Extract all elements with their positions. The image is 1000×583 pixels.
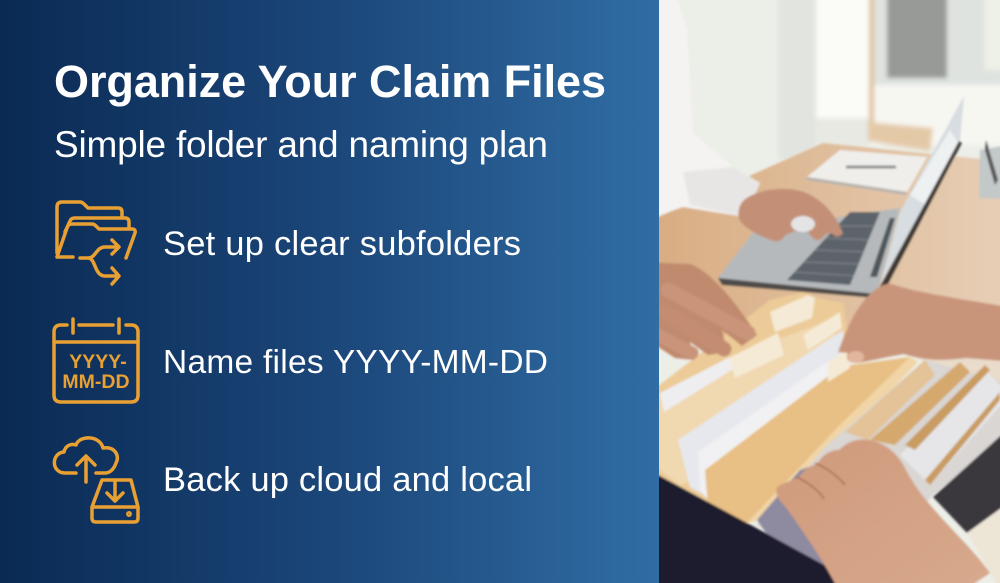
- pencil cup: [979, 140, 1000, 200]
- text: back up cloud and local: Back up cloud and local: [163, 461, 532, 499]
- text: name files: Name files YYYY-MM-DD: [163, 344, 548, 381]
- dark box front: [659, 474, 836, 583]
- icon: folders with branching arrows: [57, 202, 135, 284]
- icon: calendar with date format: MM-DD: [62, 371, 130, 393]
- front hand: [776, 439, 990, 583]
- panel: blue gradient background: [0, 0, 659, 583]
- desk: [640, 143, 1000, 340]
- keyboard: [787, 212, 880, 285]
- subtitle: Simple folder and naming plan: [54, 124, 548, 165]
- right upper hand: [838, 284, 1000, 364]
- tray papers: [756, 361, 1000, 528]
- photo: hands organizing file folders beside a laptop: [659, 0, 1000, 583]
- notebook: [807, 150, 927, 192]
- icon: cloud upload and local drive download: [54, 438, 138, 522]
- dark box right wall: [932, 434, 1000, 534]
- icon: calendar with date format: YYYY-: [69, 351, 127, 373]
- folders: [659, 292, 846, 503]
- laptop screen: [880, 96, 964, 285]
- mouse hand: [738, 189, 843, 241]
- laptop base: [718, 208, 900, 294]
- icon: calendar with date format: [54, 319, 138, 402]
- title: Organize Your Claim Files: [54, 56, 606, 107]
- text: set up clear subfolders: Set up clear subfolders: [163, 225, 521, 263]
- tray backdrop: [918, 358, 1000, 382]
- shirt: [659, 0, 738, 217]
- left hand with fingers: [659, 262, 758, 361]
- folder tabs: [770, 295, 815, 332]
